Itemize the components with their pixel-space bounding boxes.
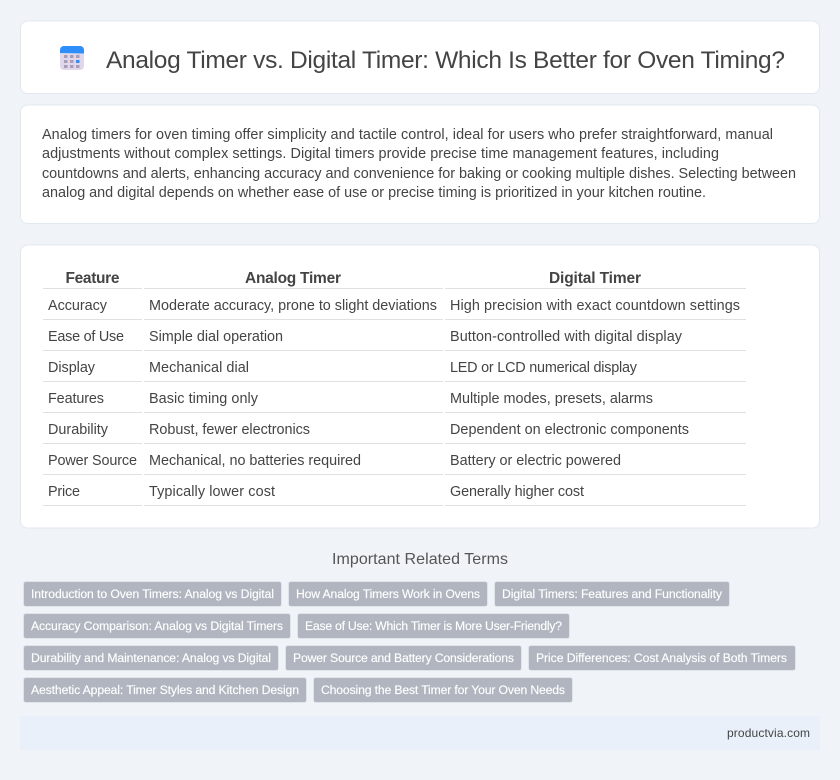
row: price: Generally higher cost bbox=[450, 484, 584, 500]
chip bbox=[288, 582, 488, 606]
table header: Feature bbox=[66, 270, 120, 287]
chip bbox=[494, 582, 730, 606]
paragraph: Analog timers for oven timing offer simplicity and tactile control, ideal for users who prefer straightforward, manual bbox=[42, 127, 773, 143]
row: durability bbox=[48, 422, 689, 438]
chip bbox=[24, 582, 282, 606]
panel: comparison table bbox=[20, 245, 820, 528]
row: accuracy: High precision with exact countdown settings bbox=[450, 298, 740, 314]
row: accuracy bbox=[48, 298, 740, 314]
table header bbox=[66, 270, 641, 287]
row: ease of use: Button-controlled with digital display bbox=[450, 329, 683, 345]
chip bbox=[24, 646, 278, 670]
row: display: Display bbox=[48, 360, 96, 376]
chip bbox=[528, 646, 796, 670]
chip: Accuracy Comparison: Analog vs Digital Timers bbox=[31, 619, 283, 633]
row: ease of use: Ease of Use bbox=[48, 329, 124, 345]
row: features: Multiple modes, presets, alarms bbox=[450, 391, 653, 407]
row: ease of use bbox=[48, 329, 683, 345]
row: price bbox=[48, 484, 584, 500]
paragraph bbox=[42, 127, 796, 201]
row: ease of use: Simple dial operation bbox=[149, 329, 283, 345]
chip: Choosing the Best Timer for Your Oven Needs bbox=[321, 683, 565, 697]
chip bbox=[24, 614, 290, 638]
row: price: Typically lower cost bbox=[149, 484, 275, 500]
row: features: Features bbox=[48, 391, 104, 407]
related terms chips bbox=[24, 582, 796, 702]
row: display: LED or LCD numerical display bbox=[450, 360, 638, 376]
chip: Introduction to Oven Timers: Analog vs Digital bbox=[31, 587, 274, 601]
row: price: Price bbox=[48, 484, 80, 500]
row: durability: Durability bbox=[48, 422, 109, 438]
chip: Durability and Maintenance: Analog vs Digital bbox=[31, 651, 271, 665]
row: display: Mechanical dial bbox=[149, 360, 249, 376]
table header: Digital Timer bbox=[549, 270, 641, 287]
chip: Price Differences: Cost Analysis of Both Timers bbox=[536, 651, 787, 665]
chip bbox=[24, 678, 306, 702]
row: accuracy: Accuracy bbox=[48, 298, 108, 314]
chip: Aesthetic Appeal: Timer Styles and Kitchen Design bbox=[31, 683, 299, 697]
paragraph: analog and digital depends on whether ease of use or precise timing is prioritized in your kitchen routine. bbox=[42, 185, 706, 201]
chip: Ease of Use: Which Timer is More User-Friendly? bbox=[305, 619, 562, 633]
row: power source: Power Source bbox=[48, 453, 137, 469]
row: power source: Battery or electric powered bbox=[450, 453, 621, 469]
row: durability: Dependent on electronic components bbox=[450, 422, 689, 438]
heading: related terms: Important Related Terms bbox=[332, 551, 508, 568]
icon: calendar bbox=[60, 46, 84, 70]
row: power source: Mechanical, no batteries required bbox=[149, 453, 361, 469]
paragraph: countdowns and alerts, enhancing accuracy and convenience for baking or cooking multiple dishes. Selecting between bbox=[42, 166, 796, 182]
chip: Digital Timers: Features and Functionality bbox=[502, 587, 723, 601]
row: display bbox=[48, 360, 638, 376]
title: Analog Timer vs. Digital Timer: Which Is Better for Oven Timing? bbox=[106, 47, 785, 74]
row: power source bbox=[48, 453, 621, 469]
chip bbox=[298, 614, 570, 638]
footer bbox=[20, 716, 820, 750]
row: features: Basic timing only bbox=[149, 391, 259, 407]
row: durability: Robust, fewer electronics bbox=[149, 422, 310, 438]
chip: Power Source and Battery Considerations bbox=[293, 651, 514, 665]
chip bbox=[314, 678, 572, 702]
header panel bbox=[20, 21, 820, 94]
panel: introduction text bbox=[20, 105, 820, 224]
paragraph: adjustments without complex settings. Digital timers provide precise time management features, including bbox=[42, 146, 719, 162]
row: accuracy: Moderate accuracy, prone to slight deviations bbox=[149, 298, 437, 314]
table header: Analog Timer bbox=[245, 270, 341, 287]
row: features bbox=[48, 391, 653, 407]
chip bbox=[286, 646, 522, 670]
footer source text: productvia.com bbox=[727, 726, 810, 740]
chip: How Analog Timers Work in Ovens bbox=[296, 587, 480, 601]
